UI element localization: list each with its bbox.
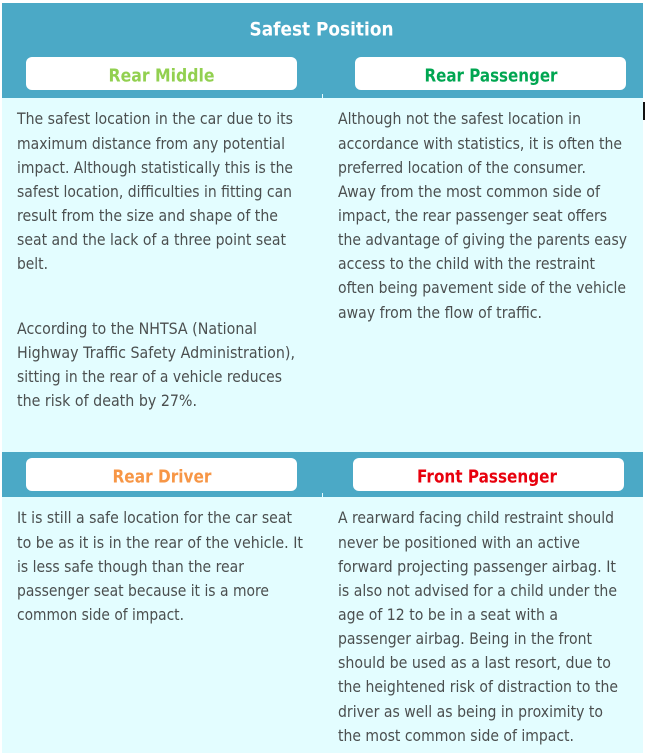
text block: front passenger description bbox=[338, 508, 618, 745]
text block: front passenger description: driver as well as being in proximity to bbox=[338, 702, 603, 721]
text block: front passenger description: age of 12 to be in a seat with a bbox=[338, 605, 558, 624]
text block: front passenger description: forward projecting passenger airbag. It bbox=[338, 557, 616, 576]
text block: rear middle description bbox=[16, 109, 293, 273]
text block: NHTSA statistic bbox=[17, 319, 295, 410]
text block: rear driver description: passenger seat because it is a more bbox=[17, 581, 269, 600]
text block: rear passenger description: impact, the rear passenger seat offers bbox=[338, 206, 607, 225]
text block: rear passenger description: Away from the most common side of bbox=[338, 182, 600, 201]
text block: rear middle description: belt. bbox=[17, 254, 48, 273]
text block: rear driver description: It is still a safe location for the car seat bbox=[17, 508, 292, 527]
text block: rear driver description: is less safe though than the rear bbox=[17, 557, 244, 576]
text block: rear middle description: seat and the lack of a three point seat bbox=[17, 230, 286, 249]
heading pill: front passenger bbox=[353, 458, 624, 491]
panel: rear passenger bbox=[338, 57, 627, 322]
text block: front passenger description: passenger airbag. Being in the front bbox=[338, 629, 592, 648]
title: Safest Position bbox=[250, 18, 394, 40]
text block: rear middle description: impact. Although statistically this is the bbox=[17, 158, 293, 177]
text block: rear passenger description: access to the child with the restraint bbox=[338, 254, 595, 273]
text block: NHTSA statistic: the risk of death by 27%. bbox=[17, 391, 197, 410]
text block: rear passenger description: away from the flow of traffic. bbox=[338, 303, 542, 322]
text block: NHTSA statistic: sitting in the rear of a vehicle reduces bbox=[17, 367, 282, 386]
heading pill: rear passenger: Rear Passenger bbox=[424, 66, 558, 86]
text block: rear passenger description bbox=[338, 109, 627, 322]
second header band bbox=[2, 452, 643, 497]
column tick marks bbox=[322, 94, 323, 497]
text block: front passenger description: should be used as a last resort, due to bbox=[338, 653, 611, 672]
heading pill: rear driver: Rear Driver bbox=[112, 466, 212, 488]
text block: rear driver description: common side of impact. bbox=[17, 605, 184, 624]
text block: front passenger description: A rearward facing child restraint should bbox=[338, 508, 614, 527]
panel: rear driver bbox=[17, 458, 303, 624]
text block: rear passenger description: Although not the safest location in bbox=[338, 109, 581, 128]
text block: rear driver description bbox=[17, 508, 303, 624]
top header band bbox=[2, 3, 643, 98]
text block: rear middle description: safest location, difficulties in fitting can bbox=[17, 182, 292, 201]
heading pill: front passenger: Front Passenger bbox=[417, 466, 557, 488]
stray black mark bbox=[643, 102, 645, 120]
text block: rear middle description: result from the size and shape of the bbox=[17, 206, 278, 225]
text block: front passenger description: never be positioned with an active bbox=[338, 533, 580, 552]
text block: rear middle description: maximum distance from any potential bbox=[17, 134, 285, 153]
text block: NHTSA statistic: According to the NHTSA (National bbox=[17, 319, 257, 338]
text block: rear passenger description: preferred location of the consumer. bbox=[338, 158, 586, 177]
text block: rear driver description: to be as it is in the rear of the vehicle. It bbox=[17, 533, 303, 552]
heading pill: rear middle: Rear Middle bbox=[108, 66, 214, 86]
heading pill: rear driver bbox=[26, 458, 297, 491]
heading pill: rear middle bbox=[26, 57, 297, 90]
text block: front passenger description: the most common side of impact. bbox=[338, 726, 574, 745]
text block: rear middle description: The safest location in the car due to its bbox=[16, 109, 293, 128]
text block: NHTSA statistic: Highway Traffic Safety Administration), bbox=[17, 343, 295, 362]
panel: front passenger bbox=[338, 458, 624, 745]
panel: rear middle bbox=[16, 57, 297, 410]
heading pill: rear passenger bbox=[355, 57, 626, 90]
